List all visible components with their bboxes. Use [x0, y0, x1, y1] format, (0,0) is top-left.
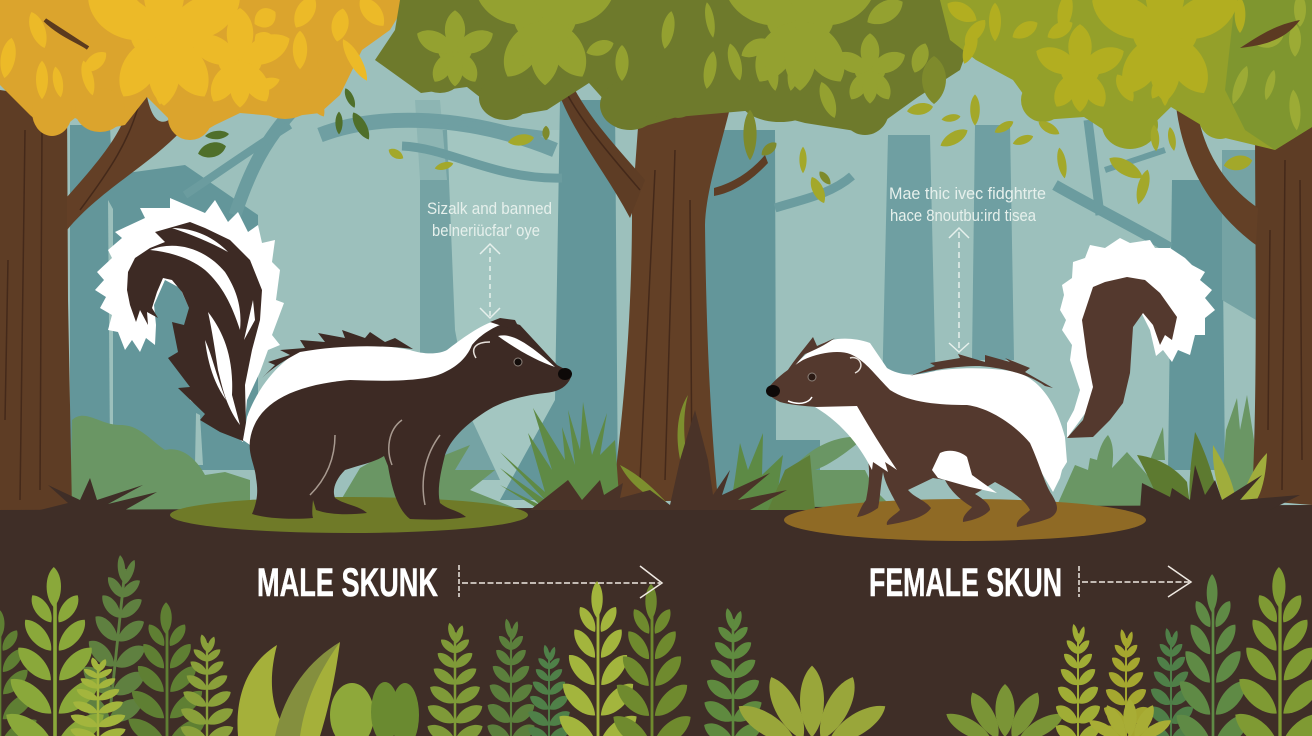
- male white back: [243, 320, 512, 445]
- grass tufts: [40, 395, 1300, 510]
- callout: female: hace 8noutbu:ird tisea: [890, 206, 1036, 225]
- male head details: [310, 318, 572, 505]
- tree trunk: left: [0, 90, 72, 510]
- label: female skunk: FEMALE SKUN: [869, 561, 1062, 605]
- female white chest: [815, 406, 897, 472]
- arrow: female callout: [949, 228, 969, 352]
- female white belly patch: [932, 451, 997, 493]
- canopy: yellow left: [0, 0, 408, 140]
- label: male skunk: MALE SKUNK: [257, 561, 438, 605]
- callout: male: belneriücfar' oye: [432, 221, 540, 240]
- tree branches: centre: [552, 72, 645, 218]
- callout: male: Sizalk and banned: [427, 199, 552, 218]
- arrow: female label: [1079, 566, 1191, 597]
- foreground plants: [0, 551, 1312, 736]
- female white stripe: [780, 339, 1067, 492]
- background trees: [70, 100, 1256, 500]
- arrow: male label: [459, 565, 662, 598]
- female back fringe: [910, 354, 1053, 388]
- canopy: lime right: [940, 0, 1312, 150]
- falling leaves: [387, 94, 1253, 206]
- background bushes: [70, 395, 1254, 510]
- bark texture: [5, 90, 1302, 500]
- female head details: [766, 337, 861, 403]
- callout: male: [427, 199, 552, 240]
- callout: female: [889, 184, 1046, 225]
- male back fringe: [262, 330, 413, 378]
- male tail: [95, 198, 284, 442]
- ground patch: female: [784, 499, 1146, 541]
- male body: [250, 322, 572, 520]
- tree branches: left: [67, 85, 182, 230]
- tree trunk: right: [1252, 110, 1312, 505]
- tree trunk: centre: [612, 100, 732, 502]
- tree branches: right: [1175, 95, 1258, 245]
- ground: [0, 505, 1312, 736]
- canopy: green centre: [375, 0, 985, 160]
- female skunk: [766, 238, 1215, 527]
- arrow: male callout: [480, 244, 500, 318]
- female body: [767, 352, 1057, 527]
- ground patch: male: [170, 497, 528, 533]
- female tail: [1060, 238, 1215, 438]
- male skunk: [95, 198, 572, 520]
- callout: female: Mae thic ivec fidghtrte: [889, 184, 1046, 203]
